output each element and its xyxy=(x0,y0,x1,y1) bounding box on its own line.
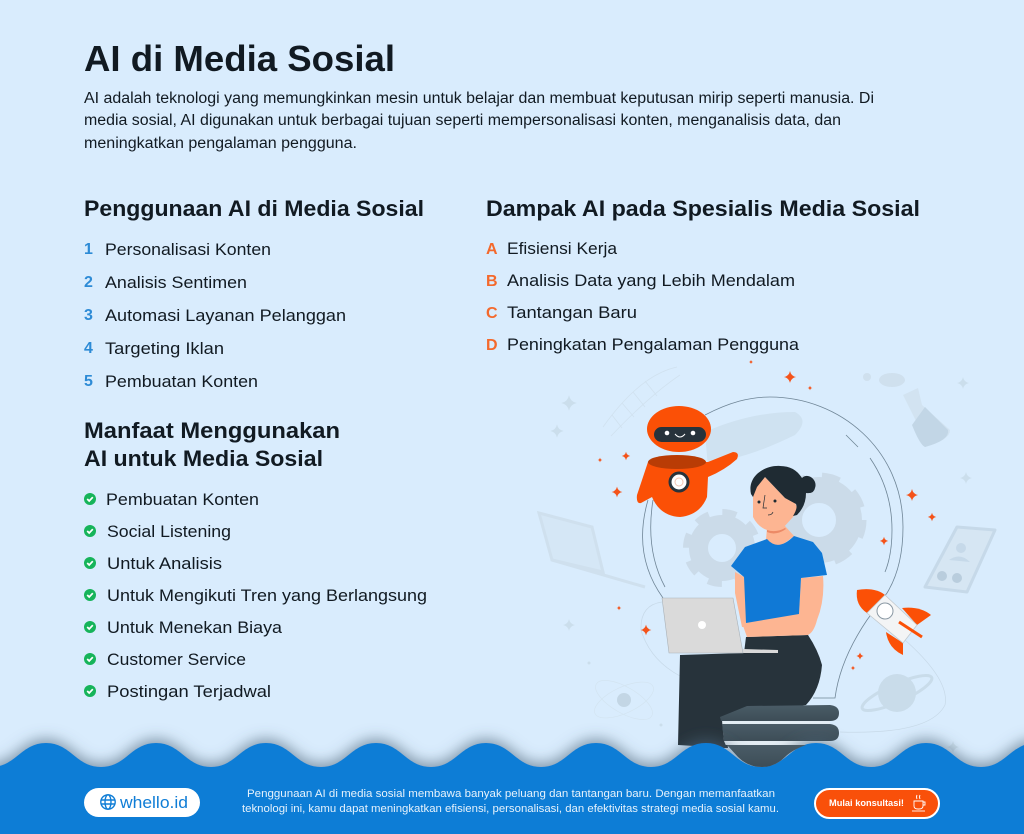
icon: DNA xyxy=(603,367,680,436)
icon: cup xyxy=(912,795,925,811)
shirt xyxy=(731,536,827,623)
lettered list: D xyxy=(486,337,498,354)
heading: manfaat xyxy=(84,418,340,471)
checklist: Untuk Analisis xyxy=(107,554,222,573)
numbered list: Analisis Sentimen xyxy=(105,273,247,292)
icon: globe xyxy=(101,795,115,809)
lettered list: Peningkatan Pengalaman Pengguna xyxy=(507,335,800,354)
checklist: Pembuatan Konten xyxy=(106,490,259,509)
gray sparkles xyxy=(550,377,972,753)
gear left xyxy=(687,513,757,583)
light bulb outline xyxy=(643,397,903,698)
pants xyxy=(678,635,822,748)
facial features xyxy=(758,495,776,515)
thin path curves xyxy=(641,602,946,732)
intro paragraph: AI adalah teknologi yang memungkinkan mesin untuk belajar dan membuat keputusan mirip seperti manusia. Di xyxy=(84,90,874,107)
numbered list: 2 xyxy=(84,274,93,291)
lettered list xyxy=(486,239,800,354)
illustration: rocket xyxy=(857,589,931,655)
panel: dampak AI xyxy=(486,196,920,354)
illustration: robot xyxy=(637,406,738,517)
lettered list: B xyxy=(486,273,498,290)
hair xyxy=(750,466,816,516)
numbered list: Pembuatan Konten xyxy=(105,372,258,391)
lettered list: Tantangan Baru xyxy=(507,303,637,322)
numbered list: 4 xyxy=(84,340,93,357)
numbered list: Automasi Layanan Pelanggan xyxy=(105,306,346,325)
orange sparkles xyxy=(598,360,936,670)
checklist: Untuk Mengikuti Tren yang Berlangsung xyxy=(107,586,427,605)
illustration: woman xyxy=(662,466,839,748)
lettered list: C xyxy=(486,305,498,322)
icon: ghost laptop xyxy=(539,513,645,587)
laptop base xyxy=(743,649,778,653)
heading: dampak: Dampak AI pada Spesialis Media Sosial xyxy=(486,196,920,221)
icon: atom xyxy=(590,673,658,727)
footer wave xyxy=(0,743,1024,834)
numbered list: Personalisasi Konten xyxy=(105,240,271,259)
panel: penggunaan AI xyxy=(84,196,424,391)
left arm xyxy=(735,572,748,627)
illustration: background objects xyxy=(539,367,995,753)
footer text: Penggunaan AI di media sosial membawa banyak peluang dan tantangan baru. Dengan memanfaatkan xyxy=(247,788,775,800)
numbered list: 5 xyxy=(84,373,93,390)
neck shadow xyxy=(767,528,786,533)
lightbulb base xyxy=(715,705,839,748)
robot neck opening xyxy=(648,455,706,469)
numbered list xyxy=(84,240,346,391)
robot head xyxy=(647,406,711,452)
button text: Mulai konsultasi! xyxy=(829,798,904,809)
robot face xyxy=(654,427,706,442)
numbered list: 3 xyxy=(84,307,93,324)
lettered list: A xyxy=(486,241,498,258)
laptop screen xyxy=(662,598,743,653)
footer logo pill xyxy=(84,788,200,817)
intro paragraph: meningkatkan pengalaman pengguna. xyxy=(84,135,357,152)
robot chest xyxy=(668,472,690,492)
checklist: Untuk Menekan Biaya xyxy=(107,618,283,637)
neck xyxy=(766,526,794,548)
intro paragraph xyxy=(84,90,874,152)
checklist: Postingan Terjadwal xyxy=(107,682,271,701)
lettered list: Efisiensi Kerja xyxy=(507,239,618,258)
footer text: teknologi ini, kamu dapat meningkatkan efisiensi, personalisasi, dan efektivitas strategi media sosial kamu. xyxy=(242,803,779,815)
face xyxy=(753,477,798,530)
icon: planet xyxy=(859,669,935,717)
right arm xyxy=(742,576,823,637)
intro paragraph: media sosial, AI digunakan untuk berbagai tujuan seperti mempersonalisasi konten, menganalisis data, dan xyxy=(84,112,841,129)
icon: phone xyxy=(925,527,995,592)
lightbulb base bottom xyxy=(727,745,806,767)
checklist xyxy=(84,490,427,701)
CTA button xyxy=(815,789,939,818)
numbered list: 1 xyxy=(84,241,93,258)
heading: penggunaan: Penggunaan AI di Media Sosial xyxy=(84,196,424,221)
gear right xyxy=(775,476,863,564)
swoosh xyxy=(705,412,802,468)
icon: flask xyxy=(863,373,950,447)
heading: manfaat: AI untuk Media Sosial xyxy=(84,446,323,471)
logo text: whello.id xyxy=(119,793,188,812)
footer text xyxy=(242,788,779,815)
checklist: Social Listening xyxy=(107,522,231,541)
robot body xyxy=(637,452,738,517)
title: AI di Media Sosial xyxy=(84,38,395,79)
heading: manfaat: Manfaat Menggunakan xyxy=(84,418,340,443)
panel: manfaat xyxy=(84,418,427,701)
checklist: Customer Service xyxy=(107,650,246,669)
lettered list: Analisis Data yang Lebih Mendalam xyxy=(507,271,795,290)
numbered list: Targeting Iklan xyxy=(105,339,224,358)
